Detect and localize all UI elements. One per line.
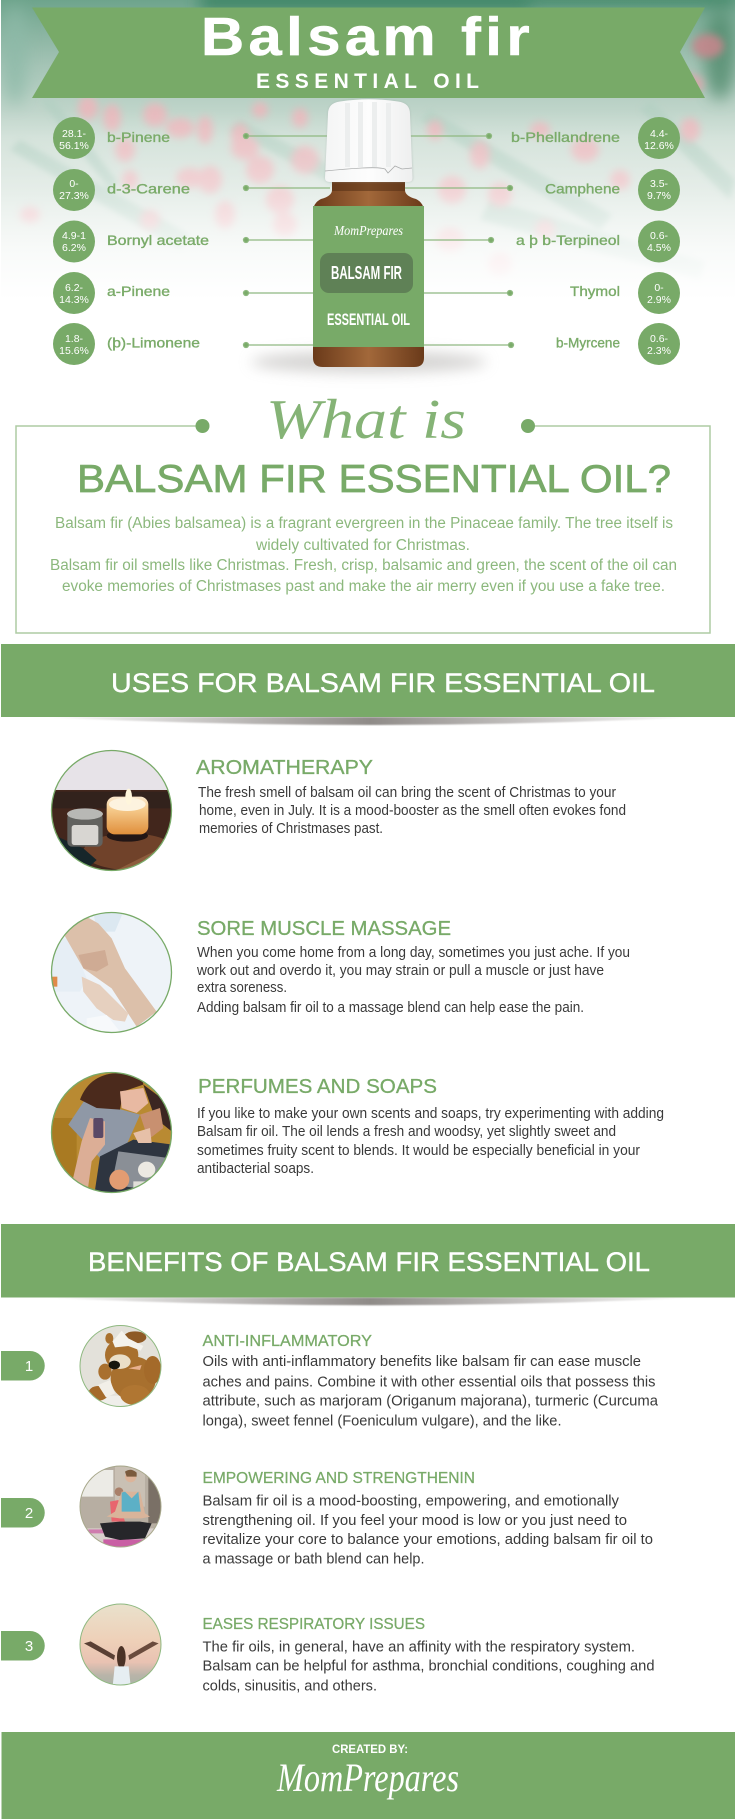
number tab 3 — [1, 1631, 45, 1660]
right compounds: b-Phellandrene — [511, 129, 620, 145]
photo: yoga — [80, 1466, 160, 1546]
right compounds: Thymol — [570, 283, 620, 299]
photo: woman at sunset — [80, 1604, 160, 1684]
eases respiratory text: colds, sinusitis, and others. — [202, 1678, 377, 1694]
left compounds — [53, 117, 209, 365]
left compounds: 56.1% — [59, 140, 89, 152]
eases respiratory text — [202, 1616, 654, 1694]
left compounds: b-Pinene — [107, 129, 170, 145]
sore muscle text — [196, 918, 630, 1016]
empowering text: Balsam fir oil is a mood-boosting, empowering, and emotionally — [202, 1494, 620, 1510]
bottle brand: MomPrepares — [333, 224, 403, 239]
anti-inflammatory text — [202, 1333, 659, 1430]
empowering text: revitalize your core to balance your emotions, adding balsam fir oil to — [202, 1532, 653, 1548]
perfumes text: Balsam fir oil. The oil lends a fresh and woodsy, yet slightly sweet and — [197, 1124, 616, 1140]
right compounds: 9.7% — [647, 190, 671, 202]
right compounds: Camphene — [545, 180, 620, 196]
left compounds: 0- — [69, 178, 79, 190]
bottle label: essential oil: ESSENTIAL OIL — [327, 310, 410, 329]
left compounds: d-3-Carene — [107, 180, 190, 196]
right compounds — [511, 117, 680, 365]
photo: candle — [52, 751, 171, 870]
left compounds: 27.3% — [59, 190, 89, 202]
right compounds: 0.6- — [650, 230, 669, 242]
aromatherapy text: The fresh smell of balsam oil can bring the scent of Christmas to your — [198, 785, 616, 801]
script heading: what is: What is — [266, 389, 466, 451]
photo: teddy bear — [80, 1326, 160, 1406]
sore muscle text: Adding balsam fir oil to a massage blend can help ease the pain. — [197, 1000, 584, 1016]
perfumes text: antibacterial soaps. — [197, 1161, 314, 1177]
left compounds: Bornyl acetate — [107, 232, 209, 248]
photo: woman with perfume — [52, 1073, 171, 1192]
photo ring: candle — [52, 750, 172, 870]
benefits section banner — [1, 1224, 735, 1305]
right compounds: a þ b-Terpineol — [516, 232, 620, 248]
perfumes text — [197, 1076, 664, 1177]
right compounds: 12.6% — [644, 140, 674, 152]
benefits section banner: BENEFITS OF BALSAM FIR ESSENTIAL OIL — [88, 1247, 650, 1277]
perfumes text: If you like to make your own scents and soaps, try experimenting with adding — [197, 1106, 664, 1122]
photo ring: sunset — [80, 1604, 161, 1685]
number tab 2 — [1, 1498, 45, 1528]
number tab 2: 2 — [25, 1505, 33, 1522]
anti-inflammatory text: longa), sweet fennel (Foeniculum vulgare), and the like. — [202, 1414, 562, 1430]
right compounds: 0.6- — [650, 333, 669, 345]
left compounds: 6.2- — [65, 282, 84, 294]
connector lines — [244, 134, 514, 348]
empowering text: a massage or bath blend can help. — [202, 1552, 424, 1568]
left compounds: (þ)-Limonene — [107, 334, 200, 350]
eases respiratory text: Balsam can be helpful for asthma, bronchial conditions, coughing and — [202, 1658, 654, 1674]
right compounds: 2.3% — [647, 345, 671, 357]
aromatherapy text — [196, 757, 626, 837]
footer — [2, 1732, 735, 1819]
photo ring: legs — [52, 912, 172, 1032]
hero background: fir branch photo — [1, 0, 735, 270]
empowering text: EMPOWERING AND STRENGTHENIN — [202, 1470, 475, 1487]
right compounds: 4.4- — [650, 128, 669, 140]
left compounds: 28.1- — [62, 128, 86, 140]
footer logo: MomPrepares — [276, 1755, 459, 1800]
subtitle: essential oil: ESSENTIAL OIL — [256, 70, 479, 93]
description text: Balsam fir oil smells like Christmas. Fresh, crisp, balsamic and green, the scent of the oil can — [50, 557, 677, 574]
right compounds: 4.5% — [647, 242, 671, 254]
eases respiratory text: The fir oils, in general, have an affinity with the respiratory system. — [202, 1640, 635, 1656]
anti-inflammatory text: aches and pains. Combine it with other essential oils that possess this — [202, 1374, 656, 1390]
bottle label plate — [320, 253, 413, 293]
description text: Balsam fir (Abies balsamea) is a fragrant evergreen in the Pinaceae family. The tree itself is — [55, 515, 673, 532]
aromatherapy text: AROMATHERAPY — [196, 757, 373, 779]
sore muscle text: When you come home from a long day, sometimes you just ache. If you — [197, 945, 630, 961]
anti-inflammatory text: attribute, such as marjoram (Origanum majorana), turmeric (Curcuma — [202, 1394, 659, 1410]
empowering text — [202, 1470, 653, 1568]
footer: CREATED BY: — [332, 1744, 408, 1756]
left compounds: 15.6% — [59, 345, 89, 357]
aromatherapy text: home, even in July. It is a mood-booster as the smell often evokes fond — [199, 803, 626, 819]
sore muscle text: SORE MUSCLE MASSAGE — [197, 918, 451, 940]
description text — [50, 515, 677, 595]
uses section banner: USES FOR BALSAM FIR ESSENTIAL OIL — [111, 668, 655, 698]
description text: widely cultivated for Christmas. — [255, 537, 470, 554]
left compounds: 6.2% — [62, 242, 86, 254]
anti-inflammatory text: ANTI-INFLAMMATORY — [202, 1333, 372, 1350]
eases respiratory text: EASES RESPIRATORY ISSUES — [202, 1616, 425, 1633]
right compounds: 2.9% — [647, 294, 671, 306]
photo: legs massage — [50, 910, 174, 1034]
anti-inflammatory text: Oils with anti-inflammatory benefits like balsam fir can ease muscle — [202, 1354, 641, 1370]
right compounds: 0- — [654, 282, 664, 294]
uses section banner — [1, 644, 735, 725]
perfumes text: PERFUMES AND SOAPS — [198, 1076, 437, 1098]
photo ring: teddy bear — [80, 1326, 161, 1406]
description text: evoke memories of Christmases past and make the air merry even if you use a fake tree. — [62, 578, 665, 595]
photo ring: yoga — [80, 1466, 161, 1547]
number tab 1 — [1, 1351, 45, 1380]
sore muscle text: work out and overdo it, you may strain or pull a muscle or just have — [196, 963, 604, 979]
title ribbon — [32, 7, 705, 98]
number tab 1: 1 — [25, 1358, 33, 1375]
heading: balsam fir essential oil: BALSAM FIR ESSENTIAL OIL? — [77, 458, 671, 501]
perfumes text: sometimes fruity scent to blends. It would be especially beneficial in your — [197, 1143, 640, 1159]
right compounds: 3.5- — [650, 178, 669, 190]
title: Balsam fir: Balsam fir — [201, 7, 534, 67]
left compounds: a-Pinene — [107, 283, 170, 299]
left compounds: 4.9-1 — [62, 230, 86, 242]
number tab 3: 3 — [25, 1638, 33, 1655]
photo ring: woman — [52, 1072, 172, 1192]
essential oil bottle — [251, 99, 487, 373]
right compounds: b-Myrcene — [556, 334, 620, 350]
sore muscle text: extra soreness. — [197, 980, 287, 996]
left compounds: 14.3% — [59, 294, 89, 306]
aromatherapy text: memories of Christmases past. — [199, 821, 383, 837]
left compounds: 1.8- — [65, 333, 84, 345]
what is panel — [16, 389, 710, 633]
empowering text: strengthening oil. If you feel your mood is low or you just need to — [202, 1513, 627, 1529]
bottle label: balsam fir: BALSAM FIR — [331, 263, 402, 283]
